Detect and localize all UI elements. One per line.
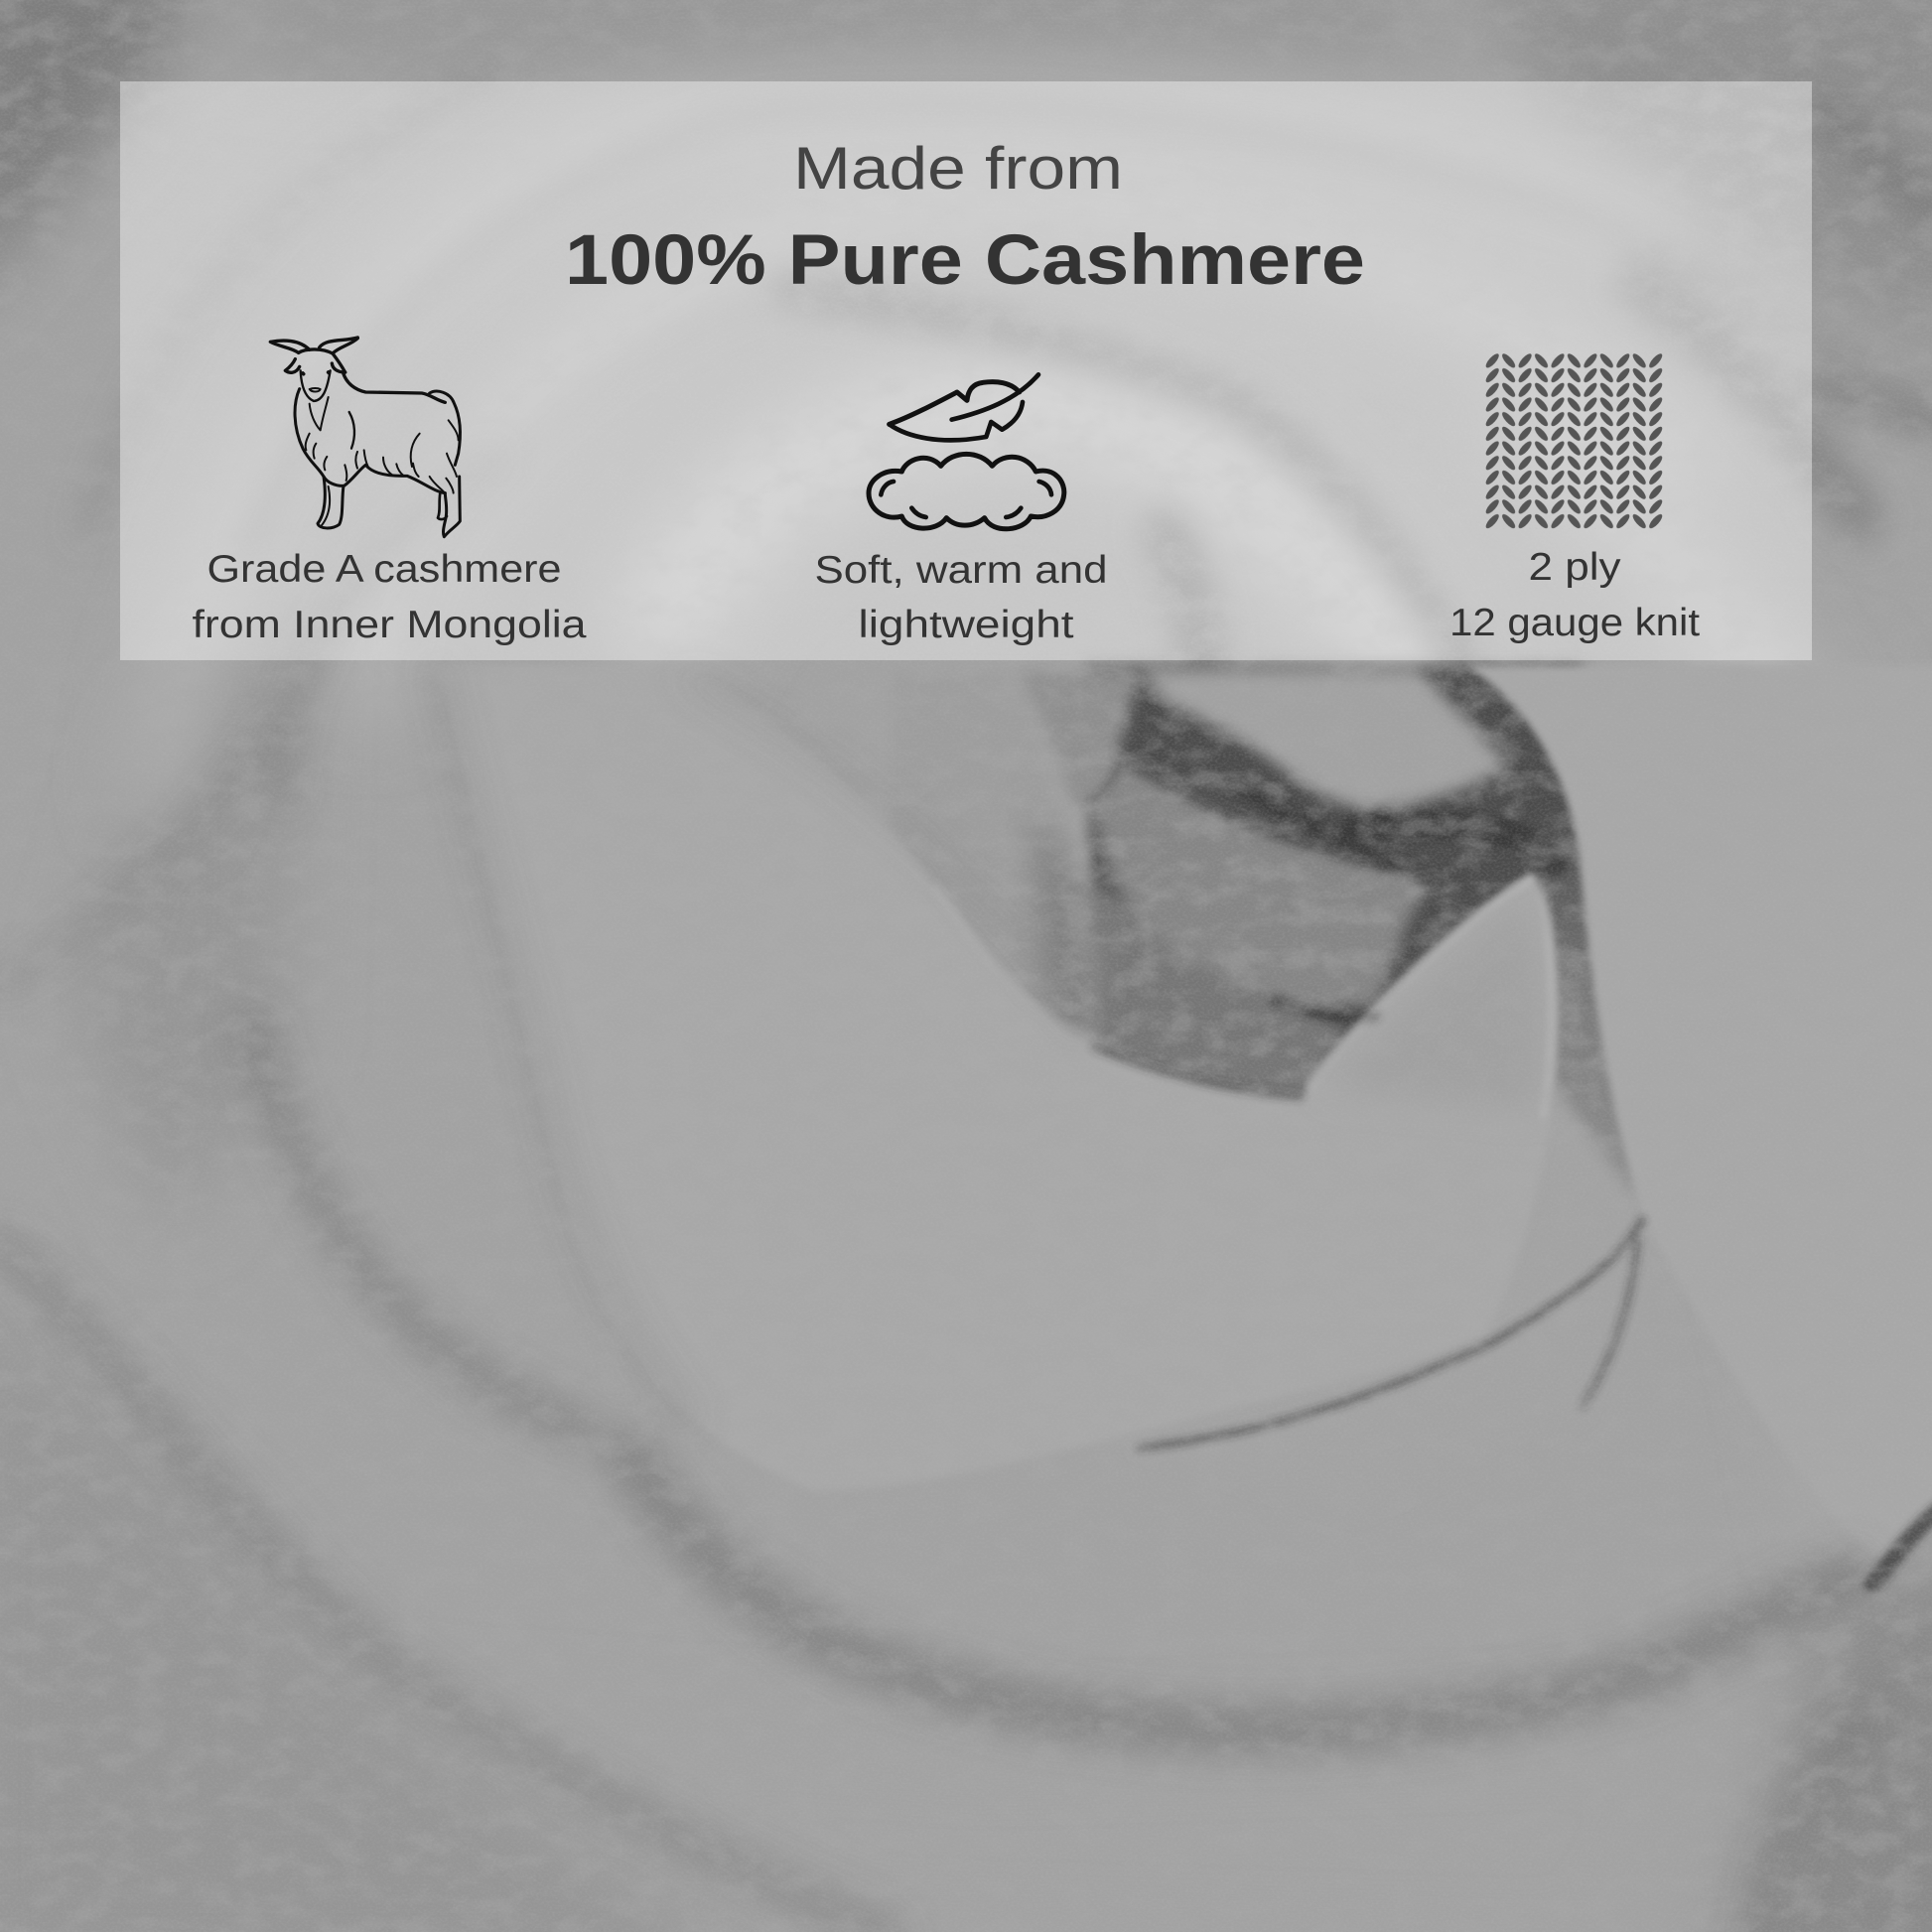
text: Soft, warm and lightweight	[814, 549, 1108, 646]
main central lobe	[438, 665, 1932, 1559]
text: 2 ply 12 gauge knit: 2 ply	[1529, 546, 1621, 589]
sharp dark creases	[1090, 761, 1932, 1584]
text: Soft, warm and lightweight: lightweight	[858, 604, 1074, 646]
heading: Made from: Made from	[793, 135, 1123, 202]
text: 2 ply 12 gauge knit	[1449, 546, 1700, 644]
text: Grade A cashmere from Inner Mongolia: from Inner Mongolia	[193, 604, 587, 646]
text: Grade A cashmere from Inner Mongolia	[193, 548, 587, 646]
icon: knit stitch pattern	[1484, 353, 1664, 528]
fabric edge highlights	[936, 878, 1552, 1115]
title: 100% Pure Cashmere: 100% Pure Cashmere	[565, 221, 1365, 300]
text: Grade A cashmere from Inner Mongolia: Grade A cashmere	[207, 548, 562, 591]
gap behind main lobe	[1134, 813, 1645, 1516]
panel-area folds: concentric arcs	[86, 73, 1932, 788]
text: Soft, warm and lightweight: Soft, warm and	[814, 549, 1108, 592]
text: 2 ply 12 gauge knit: 12 gauge knit	[1449, 602, 1700, 644]
icon: feather over cloud	[869, 374, 1064, 529]
icon: goat	[270, 338, 460, 537]
central fold cavity and lobes	[894, 665, 1584, 1111]
panel: translucent info band	[120, 81, 1812, 660]
